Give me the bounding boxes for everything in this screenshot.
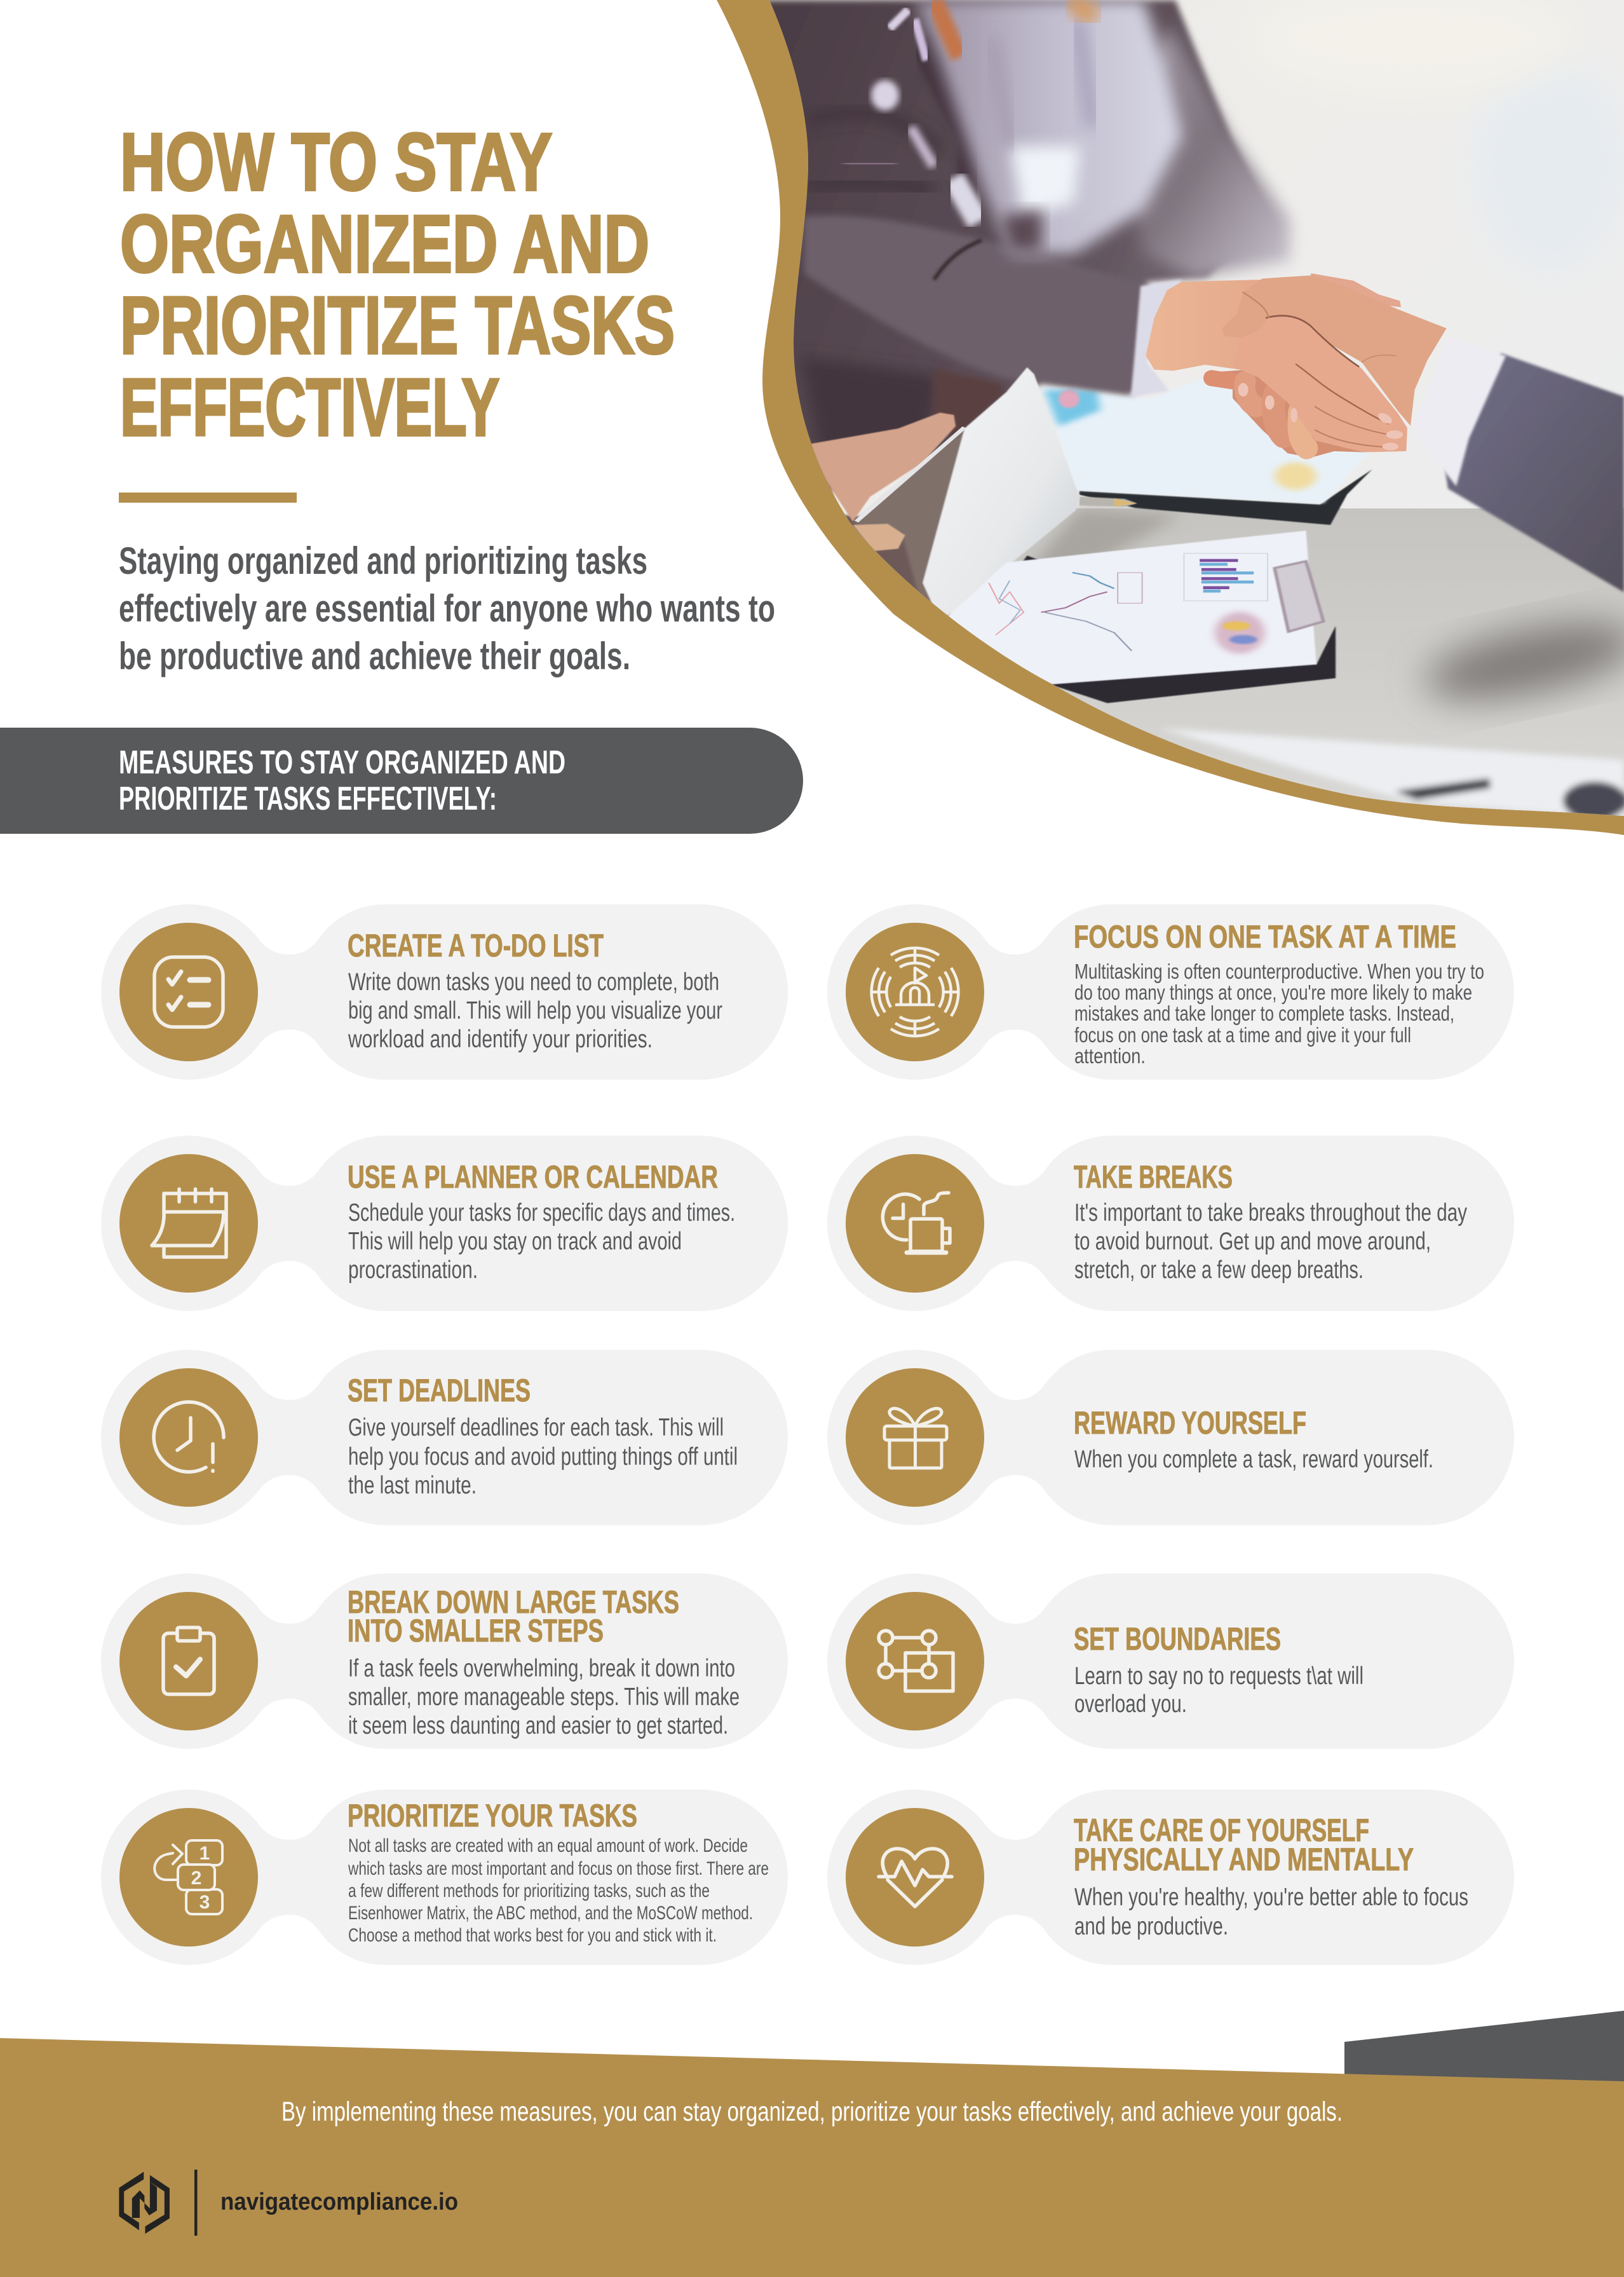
tablet screen: [923, 367, 1079, 622]
title: ORGANIZED AND: [120, 199, 649, 290]
title accent bar: [119, 493, 297, 503]
left person jacket: [762, 0, 1290, 502]
far document with folder: [1041, 379, 1393, 525]
body text: smaller, more manageable steps. This will make: [348, 1683, 740, 1711]
panel: break down large tasks: [101, 1574, 788, 1749]
body text: [348, 1414, 738, 1499]
body text: [348, 969, 722, 1053]
body text: workload and identify your priorities.: [348, 1026, 653, 1053]
card background: [101, 1350, 788, 1525]
title: EFFECTIVELY: [120, 362, 499, 453]
lower fingers: [1212, 378, 1307, 448]
icon circle: [119, 1592, 258, 1730]
footer statement: By implementing these measures, you can stay organized, prioritize your tasks effectively, and achieve your goals.: [281, 2097, 1343, 2127]
icon circle: [846, 1808, 984, 1947]
photo background: [762, 0, 1624, 839]
icon circle: [846, 1368, 984, 1507]
card background: [827, 1136, 1514, 1311]
intro paragraph: [119, 540, 775, 677]
icon circle: [846, 1592, 984, 1730]
card background: [827, 1574, 1514, 1749]
body text: [348, 1655, 740, 1739]
body text: If a task feels overwhelming, break it down into: [348, 1655, 735, 1682]
heading: INTO SMALLER STEPS: [348, 1613, 604, 1648]
body text: It's important to take breaks throughout the day: [1074, 1199, 1467, 1227]
heading: BREAK DOWN LARGE TASKS: [348, 1584, 679, 1620]
body text: which tasks are most important and focus on those first. There are: [348, 1858, 769, 1879]
body text: [1074, 1884, 1468, 1940]
hero photo: handshake over documents: [762, 0, 1624, 839]
icon: numbered priority list: 2: [191, 1868, 201, 1889]
icon: clock with alert: [154, 1402, 224, 1472]
title: HOW TO STAY: [120, 117, 552, 208]
heading: [1074, 1812, 1414, 1877]
body text: stretch, or take a few deep breaths.: [1074, 1256, 1363, 1284]
section heading pill: PRIORITIZE TASKS EFFECTIVELY:: [119, 780, 497, 817]
title: PRIORITIZE TASKS: [120, 280, 675, 371]
body text: Learn to say no to requests t\at will: [1074, 1662, 1363, 1690]
body text: When you're healthy, you're better able to focus: [1074, 1884, 1468, 1911]
body text: attention.: [1074, 1044, 1146, 1068]
footer grey accent: [1344, 2011, 1624, 2091]
card background: [827, 1790, 1514, 1965]
shirt: [871, 0, 1182, 254]
card background: [101, 1790, 788, 1965]
heading: SET BOUNDARIES: [1074, 1621, 1281, 1657]
table: [953, 508, 1624, 839]
panel: focus on one task at a time: [827, 904, 1514, 1080]
logo divider: [194, 2170, 197, 2236]
upper hand: [1222, 275, 1447, 426]
section heading pill: MEASURES TO STAY ORGANIZED AND: [119, 744, 565, 781]
panel: create a to-do list: [101, 904, 788, 1080]
footer gold band: [0, 2038, 1624, 2277]
heading: TAKE BREAKS: [1074, 1159, 1233, 1195]
tablet back shadow: [853, 428, 968, 622]
icon circle: [119, 1808, 258, 1947]
body text: Write down tasks you need to complete, both: [348, 969, 719, 996]
intro paragraph: Staying organized and prioritizing tasks: [119, 540, 647, 582]
icon circle: [846, 1154, 984, 1293]
body text: focus on one task at a time and give it your full: [1074, 1023, 1411, 1047]
forearm: [1146, 280, 1269, 373]
nails: [1238, 383, 1403, 451]
heading: PHYSICALLY AND MENTALLY: [1074, 1842, 1414, 1877]
holding hand: [808, 412, 956, 522]
icon: target with flag: [871, 948, 959, 1037]
body text: mistakes and take longer to complete tasks. Instead,: [1074, 1002, 1454, 1025]
section heading pill: [0, 728, 803, 834]
body text: Give yourself deadlines for each task. This will: [348, 1414, 724, 1441]
card background: [101, 904, 788, 1080]
handshake: [1146, 273, 1447, 458]
icon: clock and coffee mug: [883, 1193, 950, 1253]
right white cuff: [1440, 353, 1507, 487]
icon: clipboard check: [163, 1628, 214, 1694]
icon: calendar: [152, 1189, 226, 1257]
body text: [348, 1199, 735, 1284]
panel: set boundaries: [827, 1574, 1514, 1749]
icon: numbered priority list: [154, 1840, 222, 1914]
icon: numbered priority list: 1: [200, 1843, 210, 1864]
card background: [827, 904, 1514, 1080]
body text: a few different methods for prioritizing tasks, such as the: [348, 1880, 710, 1901]
panel: use a planner or calendar: [101, 1136, 788, 1311]
heading: [348, 1584, 679, 1648]
icon: heart with pulse: [879, 1849, 952, 1907]
hero gold wave band: [717, 0, 1624, 835]
lower fingers underlay: [1204, 369, 1364, 458]
left cuff: [1131, 280, 1182, 397]
heading: TAKE CARE OF YOURSELF: [1074, 1812, 1369, 1848]
heading: USE A PLANNER OR CALENDAR: [348, 1159, 718, 1195]
body text: [1074, 960, 1484, 1068]
heading: SET DEADLINES: [348, 1373, 531, 1408]
panel: prioritize your tasks: [101, 1790, 788, 1965]
body text: the last minute.: [348, 1472, 477, 1499]
back fingers of upper hand: [1311, 273, 1401, 307]
near document on clipboard: [944, 531, 1336, 703]
body text: big and small. This will help you visualize your: [348, 997, 722, 1024]
icon: checklist: [154, 957, 223, 1027]
tablet edge: [856, 427, 964, 522]
blurred foreground paper: [1159, 728, 1624, 820]
icon: gift box: [884, 1408, 947, 1468]
icon: numbered priority list: 3: [200, 1892, 210, 1913]
body text: to avoid burnout. Get up and move around,: [1074, 1228, 1431, 1255]
body text: Schedule your tasks for specific days and times.: [348, 1199, 735, 1227]
body text: and be productive.: [1074, 1913, 1228, 1940]
body text: [1074, 1662, 1363, 1718]
body text: it seem less daunting and easier to get started.: [348, 1712, 728, 1739]
body text: [1074, 1199, 1467, 1284]
logo icon: hexagon N: [119, 2172, 170, 2234]
title: [120, 117, 675, 453]
body text: [348, 1835, 769, 1946]
panel: take care of yourself: [827, 1790, 1514, 1965]
clasped hand back: [1233, 316, 1407, 452]
tablet and holding hand: [801, 367, 1079, 623]
panel: set deadlines: [101, 1350, 788, 1525]
body text: procrastination.: [348, 1256, 478, 1284]
body text: Choose a method that works best for you and stick with it.: [348, 1925, 717, 1946]
heading: CREATE A TO-DO LIST: [348, 928, 604, 963]
finger creases: [1243, 292, 1396, 447]
body text: Multitasking is often counterproductive. When you try to: [1074, 960, 1484, 983]
icon circle: [119, 1368, 258, 1507]
right person jacket sleeve: [1442, 353, 1624, 592]
body text: help you focus and avoid putting things off until: [348, 1443, 738, 1471]
lower thumb: [853, 524, 905, 551]
dark area behind lower hand: [801, 510, 947, 623]
heading: REWARD YOURSELF: [1074, 1405, 1306, 1441]
body text: do too many things at once, you're more likely to make: [1074, 981, 1472, 1004]
card background: [101, 1574, 788, 1749]
heading: PRIORITIZE YOUR TASKS: [348, 1798, 637, 1833]
icon circle: [119, 923, 258, 1061]
card background: [101, 1136, 788, 1311]
panel: take breaks: [827, 1136, 1514, 1311]
body text: When you complete a task, reward yourself.: [1074, 1446, 1433, 1473]
intro paragraph: be productive and achieve their goals.: [119, 635, 630, 677]
body text: Eisenhower Matrix, the ABC method, and the MoSCoW method.: [348, 1903, 753, 1924]
body text: overload you.: [1074, 1690, 1187, 1718]
panel: reward yourself: [827, 1350, 1514, 1525]
heading: FOCUS ON ONE TASK AT A TIME: [1074, 919, 1456, 955]
icon: linked nodes and square: [879, 1631, 953, 1691]
logo wordmark: navigatecompliance.io: [220, 2189, 458, 2215]
icon circle: [846, 923, 984, 1061]
intro paragraph: effectively are essential for anyone who wants to: [119, 587, 775, 630]
card background: [827, 1350, 1514, 1525]
body text: Not all tasks are created with an equal amount of work. Decide: [348, 1835, 748, 1856]
body text: This will help you stay on track and avoid: [348, 1228, 682, 1255]
icon circle: [119, 1154, 258, 1293]
